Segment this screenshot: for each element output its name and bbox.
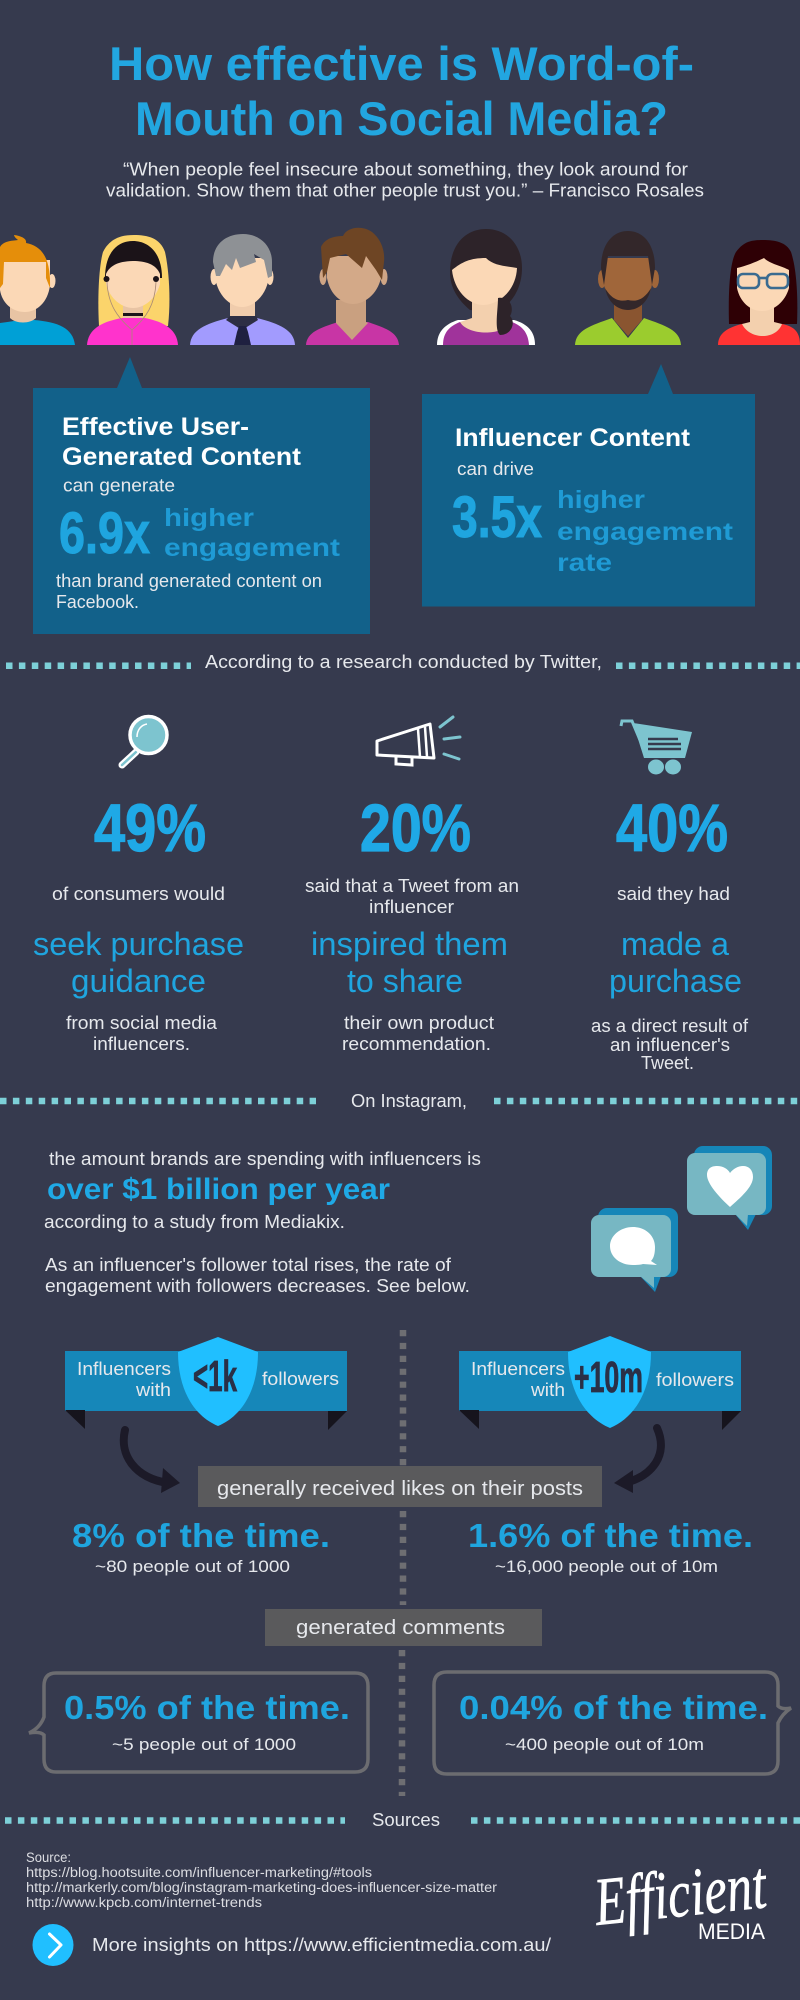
text block: source links (26, 1850, 498, 1910)
source note: according to a study from Mediakix. (44, 1212, 345, 1232)
lead-in text: can generate (63, 476, 175, 496)
highlighted figure: over $1 billion per year (47, 1173, 390, 1206)
title (109, 37, 694, 145)
panel heading (62, 413, 302, 471)
panel heading: Effective User- (62, 413, 249, 441)
quote: validation. Show them that other people trust you.” – Francisco Rosales (106, 180, 704, 200)
stat label (557, 486, 734, 577)
stat label: engagement (557, 518, 734, 546)
person 7: red top with glasses (718, 240, 800, 345)
ribbon labels (77, 1359, 339, 1400)
closing text: influencers. (93, 1034, 190, 1054)
ribbon labels: followers (262, 1369, 339, 1389)
follower explanation: engagement with followers decreases. See below. (45, 1276, 470, 1296)
ribbon labels (471, 1359, 734, 1400)
follower explanation: As an influencer's follower total rises, the rate of (45, 1255, 452, 1275)
title: How effective is Word-of- (109, 37, 694, 90)
person 4: brown hair bun (306, 228, 399, 345)
stat label: engagement (164, 534, 341, 562)
intro text: influencer (369, 897, 454, 917)
arrow: right ribbon to likes (614, 1428, 661, 1493)
ribbon: influencers with over 10m followers (459, 1336, 741, 1430)
stat column: 40%: 40% (616, 791, 728, 866)
text block: source links: https://blog.hootsuite.com/influencer-marketing/#tools (26, 1865, 372, 1880)
callout: comments under 1k: 0.5% of the time. (64, 1689, 350, 1726)
closing text: an influencer's (610, 1035, 730, 1055)
panel: influencer content (422, 364, 755, 606)
closing text: as a direct result of (591, 1016, 749, 1036)
callout: comments over 10m: ~400 people out of 10m (505, 1735, 704, 1754)
intro text: of consumers would (52, 884, 225, 904)
highlighted phrase: to share (347, 963, 463, 999)
highlighted phrase: guidance (71, 963, 206, 999)
person 2: yellow hair with earbuds (87, 235, 178, 345)
ribbon labels: with (530, 1380, 565, 1400)
closing text: Tweet. (641, 1053, 694, 1073)
callout: comments under 1k: ~5 people out of 1000 (112, 1735, 296, 1754)
intro text (305, 876, 519, 917)
ribbon band (65, 1351, 347, 1430)
stat label: higher (164, 504, 254, 532)
shield badge (568, 1336, 651, 1428)
text block: source links: http://markerly.com/blog/instagram-marketing-does-influencer-size-matter (26, 1880, 498, 1895)
stat column: 20% (305, 791, 519, 1054)
shield badge (178, 1337, 258, 1426)
quote (106, 160, 704, 200)
closing text: than brand generated content on (56, 571, 322, 591)
arrow: left ribbon to likes (124, 1430, 180, 1493)
intro text: said they had (617, 884, 730, 904)
stat column: 40% (591, 791, 749, 1073)
icon: comment speech bubble (591, 1208, 678, 1292)
quote: “When people feel insecure about something, they look around for (123, 160, 688, 180)
panel heading: Generated Content (62, 443, 302, 471)
panel heading: Influencer Content (455, 424, 691, 452)
section divider: twitter research: According to a research conducted by Twitter, (205, 652, 602, 672)
label: generated comments: generated comments (296, 1617, 505, 1639)
text block: instagram spending (44, 1149, 481, 1296)
intro text: said that a Tweet from an (305, 876, 519, 896)
ribbon band (459, 1351, 741, 1430)
lead-in text: can drive (457, 459, 534, 479)
label: generated comments (265, 1609, 542, 1646)
closing text: Facebook. (56, 592, 139, 612)
section divider: instagram: On Instagram, (351, 1091, 467, 1111)
stat column: 49%: 49% (94, 791, 206, 866)
stat column: 20%: 20% (360, 791, 471, 866)
ribbon labels: Influencers (77, 1359, 171, 1379)
ribbon: influencers with under 1k followers (65, 1337, 347, 1430)
logo: efficient media: MEDIA (698, 1919, 765, 1944)
closing text (591, 1016, 749, 1073)
closing text (56, 571, 322, 612)
stat column: 49% (33, 791, 244, 1054)
stat: likes under 1k (72, 1517, 330, 1576)
closing text: recommendation. (342, 1034, 491, 1054)
highlighted phrase: inspired them (311, 926, 508, 962)
highlighted phrase (33, 926, 244, 999)
stat label: higher (557, 486, 645, 514)
vertical dotted divider (402, 1330, 403, 1796)
callout: comments over 10m: 0.04% of the time. (459, 1689, 768, 1726)
stat label: rate (557, 549, 612, 577)
illustration: row of people (0, 228, 800, 345)
icon: megaphone (377, 717, 460, 765)
person 1: orange hair (0, 235, 75, 345)
highlighted phrase (311, 926, 508, 999)
stat: likes over 10m (468, 1517, 753, 1576)
icon: shopping cart (621, 721, 692, 774)
callout: comments under 1k (29, 1673, 368, 1772)
stat: 6.9x: 6.9x (59, 501, 150, 566)
stat: likes over 10m: 1.6% of the time. (468, 1517, 753, 1554)
person 3: grey hair with tie (190, 234, 295, 345)
follower explanation (45, 1255, 470, 1296)
call to action text: More insights on https://www.efficientmedia.com.au/ (92, 1935, 551, 1955)
ribbon labels: with (135, 1380, 171, 1400)
title: Mouth on Social Media? (135, 92, 668, 145)
stat: likes over 10m: ~16,000 people out of 10m (495, 1557, 718, 1576)
label: likes on posts (198, 1466, 602, 1507)
text block: source links: http://www.kpcb.com/internet-trends (26, 1895, 262, 1910)
icon: chevron button (32, 1924, 74, 1966)
text block: instagram spending: the amount brands are spending with influencers is (49, 1149, 481, 1169)
label: likes on posts: generally received likes on their posts (217, 1478, 583, 1500)
badge number: <1k (193, 1352, 237, 1401)
stat: 3.5x: 3.5x (452, 485, 542, 550)
ribbon labels: Influencers (471, 1359, 565, 1379)
person 6: dark skin with beard (575, 231, 681, 345)
closing text (66, 1013, 218, 1054)
panel: effective user-generated content (33, 357, 370, 634)
ribbon labels: followers (656, 1370, 734, 1390)
closing text: from social media (66, 1013, 218, 1033)
closing text: their own product (344, 1013, 494, 1033)
icon: magnifying glass (122, 716, 167, 765)
highlighted phrase: seek purchase (33, 926, 244, 962)
stat: likes under 1k: ~80 people out of 1000 (95, 1557, 290, 1576)
callout: comments over 10m (434, 1672, 791, 1774)
icon: heart speech bubble (687, 1146, 772, 1230)
badge number: +10m (574, 1353, 643, 1402)
highlighted phrase: made a (621, 926, 729, 962)
closing text (342, 1013, 494, 1054)
stat: likes under 1k: 8% of the time. (72, 1517, 330, 1554)
highlighted phrase: purchase (609, 963, 742, 999)
person 5: dark hair braid (437, 229, 535, 345)
highlighted phrase (609, 926, 742, 999)
stat label (164, 504, 341, 562)
text block: source links: Source: (26, 1850, 71, 1865)
section divider: sources: Sources (372, 1810, 440, 1830)
